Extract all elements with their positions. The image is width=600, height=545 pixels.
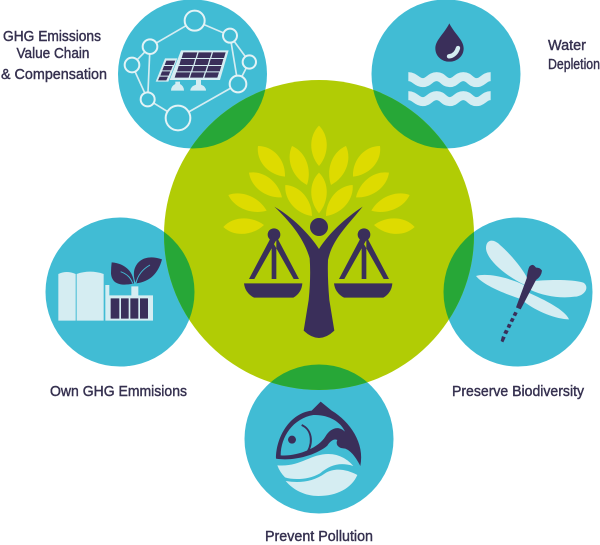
label: GHG Emissions Value Chain & Compensation: Value Chain — [16, 46, 90, 62]
left scale — [244, 228, 302, 298]
circle: GHG value chain — [118, 0, 267, 148]
label: Own GHG Emmisions: Own GHG Emmisions — [50, 384, 187, 400]
gill and eye — [302, 425, 311, 455]
icon: fish and water — [276, 402, 361, 496]
leaves — [111, 257, 162, 285]
icon: water drop and waves — [408, 23, 491, 102]
label: Water Depletion — [548, 38, 600, 73]
label: GHG Emissions Value Chain & Compensation: & Compensation — [1, 67, 107, 83]
right scale — [334, 228, 392, 298]
central lime circle — [164, 80, 474, 390]
network lines — [132, 21, 249, 118]
circle overlaps — [164, 90, 474, 390]
fish body interior — [281, 415, 345, 455]
label: GHG Emissions Value Chain & Compensation — [1, 29, 107, 83]
network nodes — [125, 11, 256, 130]
small solar panel — [156, 58, 177, 82]
circle: own GHG emissions — [46, 218, 194, 366]
icon: dragonfly — [476, 241, 586, 342]
water drop — [435, 23, 464, 62]
wings — [476, 241, 586, 319]
tree leaves — [223, 126, 415, 234]
circle: water depletion — [372, 0, 520, 148]
circle: prevent pollution — [244, 364, 394, 514]
icon: factory with leaves — [58, 257, 162, 321]
label: Preserve Biodiversity: Preserve Biodiversity — [452, 384, 585, 400]
factory windows — [111, 298, 148, 319]
drop highlight — [449, 48, 458, 56]
figure with raised arms — [244, 207, 392, 338]
large solar panel — [170, 50, 229, 80]
water — [277, 454, 357, 496]
icon: solar panel network — [125, 11, 256, 130]
waves — [408, 77, 491, 102]
fish — [276, 402, 361, 466]
label: GHG Emissions Value Chain & Compensation: GHG Emissions — [3, 29, 101, 45]
icon: tree of justice — [223, 126, 415, 338]
storage tanks — [58, 272, 104, 321]
tail — [501, 312, 518, 342]
circle: preserve biodiversity — [444, 218, 592, 366]
factory building — [105, 285, 153, 321]
panel stands — [171, 80, 206, 91]
body — [516, 265, 542, 309]
label: Water Depletion: Water — [548, 38, 586, 54]
label: Prevent Pollution: Prevent Pollution — [265, 529, 373, 545]
